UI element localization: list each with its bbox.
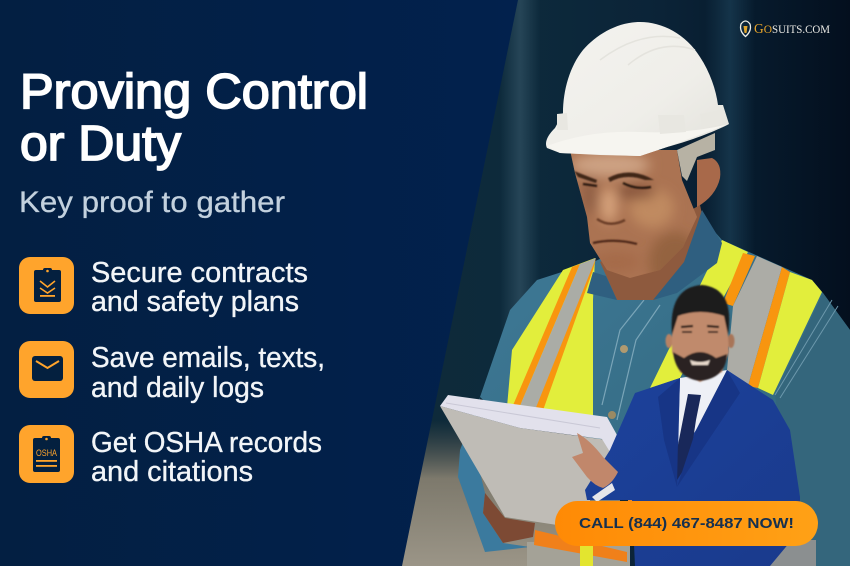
title: Proving Control [20,65,368,119]
icon: OSHA clipboard: OSHA [36,448,57,458]
white hard hat [546,22,729,156]
worker: hard hat, vest and denim shirt [458,22,850,566]
list item: emails [19,341,325,404]
item text: Secure contracts [91,257,308,289]
face [570,150,697,278]
denim shirt torso [480,215,850,566]
forearm [483,493,535,543]
left sleeve [458,397,530,552]
logo: GoSuits.com [741,21,830,37]
necktie [676,394,701,480]
item text: and daily logs [91,372,264,404]
left vest panel [507,258,595,417]
item text: Get OSHA records [91,427,322,459]
item text: Save emails, texts, [91,342,325,374]
attorney in blue suit [572,285,800,566]
lapels [658,370,740,487]
left navy panel [0,0,518,566]
call to action button [555,501,818,546]
list item: OSHA [19,425,322,488]
icon: OSHA clipboard [19,425,74,483]
shirt collar [653,210,722,300]
item text [91,427,322,488]
vest hem and trousers below the button [527,483,816,566]
subtitle: Key proof to gather [19,186,285,219]
white shirt [678,370,727,455]
item text [91,257,308,318]
logo: GoSuits.com: SUITS.COM [772,22,830,36]
title [20,65,368,171]
shirt placket [602,300,660,420]
item text: and citations [91,456,253,488]
neck [600,205,706,300]
icon: clipboard with checkmark [19,257,74,314]
pointing hand [572,433,618,488]
icon: shield keyhole [741,21,750,36]
icon: envelope [19,341,74,398]
ear [697,158,720,207]
head [666,285,734,382]
stack of papers [440,395,617,530]
call to action button: CALL (844) 467-8487 NOW! [579,515,794,532]
right vest panel [650,240,822,395]
item text: and safety plans [91,286,299,318]
shirt cuff [592,483,615,502]
blurred construction site background [380,0,850,566]
title: or Duty [20,117,182,171]
item text [91,342,325,404]
grey hair [677,133,715,181]
suit jacket [585,370,800,566]
list item: contracts [19,257,308,318]
shirt buttons [608,345,628,419]
logo: GoSuits.com: GO [754,22,772,37]
